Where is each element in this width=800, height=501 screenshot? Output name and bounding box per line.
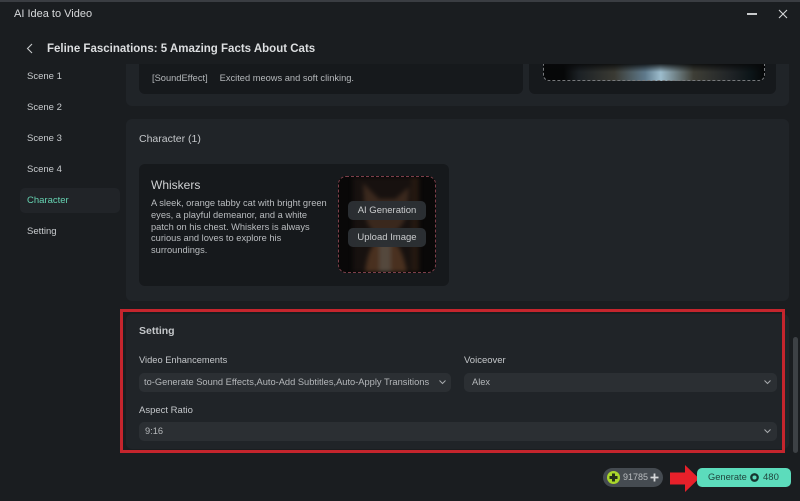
generate label: Generate xyxy=(708,472,747,482)
icon: close xyxy=(778,10,788,18)
AI Generation button: AI Generation xyxy=(358,205,416,216)
scene image thumbnail xyxy=(543,60,765,81)
thumbnail vignette xyxy=(544,60,764,72)
icon: back arrow xyxy=(26,44,32,54)
character description: eyes, a playful demeanor, and a white xyxy=(151,210,307,220)
aspect ratio dropdown: 9:16 xyxy=(145,426,163,436)
video enhancements label: Video Enhancements xyxy=(139,355,227,365)
scene image card xyxy=(529,60,776,94)
panel: scene prompt xyxy=(126,60,789,106)
character card xyxy=(139,164,449,286)
video enhancements dropdown xyxy=(139,373,451,392)
character image xyxy=(338,176,436,273)
credit count: 91785 xyxy=(623,472,648,482)
nav: Scene 1: Scene 1 xyxy=(27,71,62,82)
nav: Character selected xyxy=(20,188,120,213)
nav: Character selected: Character xyxy=(27,195,69,206)
Upload Image button xyxy=(348,228,426,247)
sound effect text: [SoundEffect] Excited meows and soft clinking. xyxy=(152,73,354,83)
icon: chevron xyxy=(764,380,771,384)
icon: credit token xyxy=(750,473,759,482)
icon: chevron xyxy=(764,429,771,434)
icon: credit coin xyxy=(607,471,620,484)
voiceover dropdown xyxy=(464,373,777,392)
aspect ratio label: Aspect Ratio xyxy=(139,405,193,416)
panel: character xyxy=(126,119,789,301)
Upload Image button: Upload Image xyxy=(357,232,417,243)
cat illustration xyxy=(354,177,420,272)
icon: chevron xyxy=(439,380,446,384)
window title: AI Idea to Video xyxy=(14,8,92,20)
generate button xyxy=(697,468,791,487)
header band xyxy=(0,0,800,64)
generate cost: 480 xyxy=(763,472,779,483)
AI Generation button xyxy=(348,201,426,220)
red highlight box xyxy=(120,309,785,453)
character description xyxy=(151,198,327,255)
nav: Setting: Setting xyxy=(27,226,57,237)
character description: patch on his chest. Whiskers is always xyxy=(151,222,310,232)
video enhancements dropdown: to-Generate Sound Effects,Auto-Add Subtitles,Auto-Apply Transitions xyxy=(144,377,429,387)
character heading: Character (1) xyxy=(139,133,201,145)
setting heading: Setting xyxy=(139,325,175,337)
red arrow xyxy=(670,465,697,492)
page heading: Feline Fascinations: 5 Amazing Facts About Cats xyxy=(47,43,315,55)
character description: A sleek, orange tabby cat with bright green xyxy=(151,198,327,208)
voiceover dropdown: Alex xyxy=(472,377,490,387)
panel: setting xyxy=(126,314,789,449)
icon: minimize xyxy=(747,13,757,14)
character description: curious and loves to explore his xyxy=(151,233,281,243)
character description: surroundings. xyxy=(151,245,207,255)
credits pill xyxy=(603,468,663,487)
character name: Whiskers xyxy=(151,178,200,192)
nav: Scene 3: Scene 3 xyxy=(27,133,62,144)
aspect ratio dropdown xyxy=(139,422,777,441)
nav: Scene 2: Scene 2 xyxy=(27,102,62,113)
scrollbar thumb xyxy=(793,337,798,453)
nav: Scene 4: Scene 4 xyxy=(27,164,62,175)
voiceover label: Voiceover xyxy=(464,355,506,366)
sidebar navigation xyxy=(27,71,69,237)
icon: plus xyxy=(650,474,658,482)
prompt text card xyxy=(139,60,523,94)
